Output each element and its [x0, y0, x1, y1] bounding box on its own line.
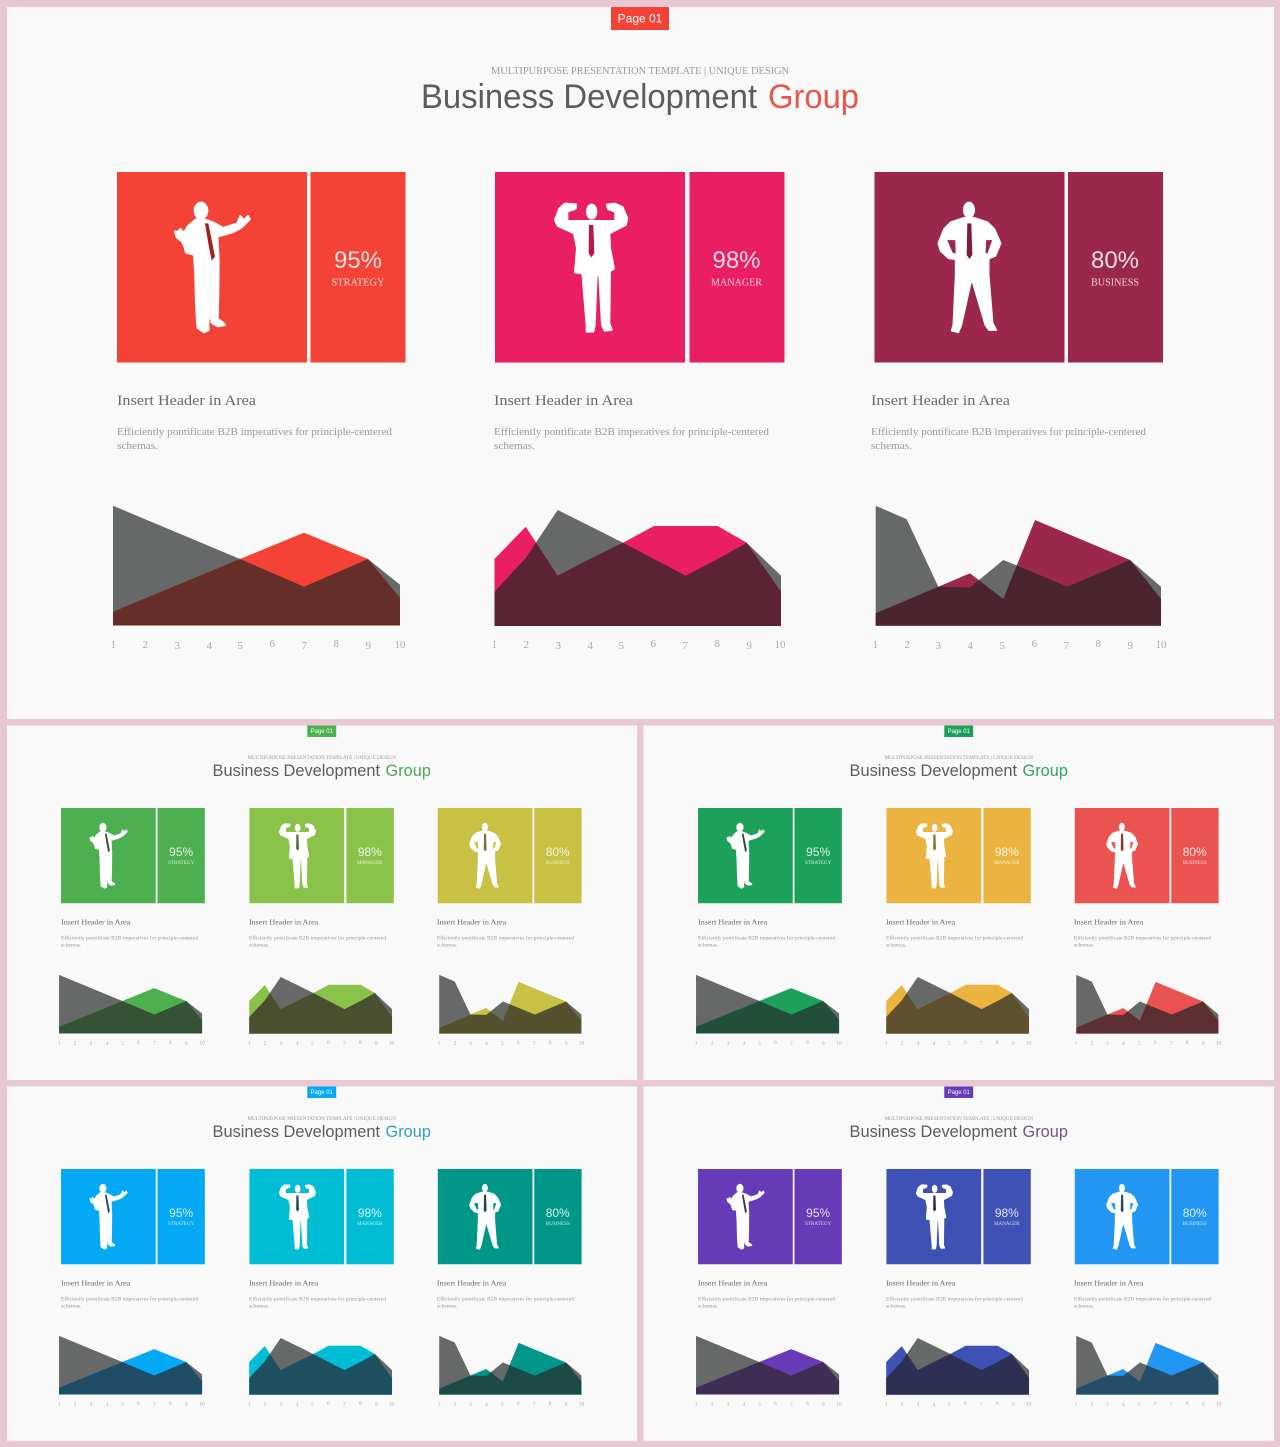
slide content: blue teal: Group: [386, 1122, 431, 1141]
slide content: purple indigo blue: 95%: [806, 1206, 830, 1220]
slide content: green: 12345678910: [58, 1040, 205, 1047]
slide content: green: Insert Header in Area: [61, 917, 131, 927]
text block: column 1: [117, 393, 392, 452]
panel: strategy card: 95%: [334, 247, 382, 274]
slide content: green amber red: Page 01: [948, 729, 971, 735]
icon: flexing businessman: [555, 204, 627, 332]
slide: purple indigo blue: [644, 1086, 1274, 1441]
slide content: green: 12345678910: [438, 1040, 584, 1047]
slide content: blue teal: Page 01: [311, 1090, 334, 1096]
slide content: blue teal: BUSINESS: [546, 1221, 570, 1227]
slide content: green: Efficiently pontificate B2B imperatives for principle-centered: [437, 934, 574, 942]
slide content: blue teal: 12345678910: [438, 1401, 584, 1408]
slide content: purple indigo blue: schemas.: [886, 1303, 907, 1310]
slide content: purple indigo blue: MULTIPURPOSE PRESENTATION TEMPLATE | UNIQUE DESIGN: [884, 1116, 1033, 1122]
slide content: green amber red: Business Development: [850, 761, 1017, 780]
slide content: purple indigo blue: Efficiently pontificate B2B imperatives for principle-centered: [1074, 1295, 1211, 1303]
panel: business card: BUSINESS: [1091, 276, 1139, 288]
slide content: green amber red: 95%: [806, 845, 830, 859]
slide content: green: 98%: [358, 845, 382, 859]
slide content: green: MULTIPURPOSE PRESENTATION TEMPLATE | UNIQUE DESIGN: [247, 755, 396, 761]
slide content: green amber red: Insert Header in Area: [886, 917, 956, 927]
slide content: blue teal: 12345678910: [248, 1401, 395, 1408]
slide content: green: Insert Header in Area: [249, 917, 319, 927]
slide content: blue teal: Insert Header in Area: [61, 1278, 131, 1288]
slide content: green amber red: Group: [1023, 761, 1068, 780]
slide content: purple indigo blue: [695, 1086, 1221, 1408]
panel: business card: 80%: [1091, 247, 1139, 274]
slide content: purple indigo blue: 98%: [995, 1206, 1019, 1220]
text block: column 3: [871, 393, 1146, 452]
slide content: green: Group: [386, 761, 431, 780]
text block: column 1: schemas.: [117, 440, 158, 452]
area chart 2: 12345678910: [492, 638, 786, 652]
slide content: green amber red: 12345678910: [1075, 1040, 1221, 1047]
slide content: blue teal: schemas.: [61, 1303, 82, 1310]
title: Business Development: [421, 78, 758, 116]
icon: presenting businessman: [175, 202, 250, 332]
slide content: blue teal: Business Development: [213, 1122, 380, 1141]
slide content: blue teal: Efficiently pontificate B2B imperatives for principle-centered: [437, 1295, 574, 1303]
slide content: blue teal: Efficiently pontificate B2B imperatives for principle-centered: [61, 1295, 198, 1303]
slide content: blue teal: 12345678910: [58, 1401, 205, 1408]
text block: column 2: [494, 393, 769, 452]
slide content: purple indigo blue: Insert Header in Area: [886, 1278, 956, 1288]
slide: blue teal: [7, 1086, 637, 1441]
slide content: purple indigo blue: 80%: [1183, 1206, 1207, 1220]
icon: hands on hips businessman: [938, 202, 1001, 332]
slide content: purple indigo blue: schemas.: [1074, 1303, 1095, 1310]
slide content: green: 95%: [169, 845, 193, 859]
slide content: green amber red: schemas.: [1074, 942, 1095, 949]
title: Group: [768, 78, 859, 116]
slide content: purple indigo blue: 12345678910: [1075, 1401, 1221, 1408]
slide content: purple indigo blue: STRATEGY: [805, 1221, 831, 1227]
slide content: green: schemas.: [61, 942, 82, 949]
panel: business card: [874, 172, 1163, 362]
slide content: green amber red: 12345678910: [885, 1040, 1032, 1047]
slide content: purple indigo blue: Insert Header in Area: [698, 1278, 768, 1288]
slide content: blue teal: Insert Header in Area: [437, 1278, 507, 1288]
panel: manager card: MANAGER: [711, 276, 763, 288]
slide content: green: 80%: [546, 845, 570, 859]
slide content: blue teal: schemas.: [249, 1303, 270, 1310]
slide content: blue teal: 95%: [169, 1206, 193, 1220]
slide content: green: Efficiently pontificate B2B imperatives for principle-centered: [249, 934, 386, 942]
slide content: green amber red: schemas.: [886, 942, 907, 949]
slide content: purple indigo blue: Page 01: [948, 1090, 971, 1096]
slide content: purple indigo blue: Group: [1023, 1122, 1068, 1141]
slide content: green: Efficiently pontificate B2B imperatives for principle-centered: [61, 934, 198, 942]
slide content: purple indigo blue: Efficiently pontificate B2B imperatives for principle-centered: [886, 1295, 1023, 1303]
panel: strategy card: [117, 172, 406, 362]
text block: column 1: Insert Header in Area: [117, 393, 256, 409]
slide content: green: STRATEGY: [168, 860, 194, 866]
slide: main red and pink: [7, 7, 1274, 719]
slide content: purple indigo blue: 12345678910: [695, 1401, 842, 1408]
subtitle: MULTIPURPOSE PRESENTATION TEMPLATE | UNIQUE DESIGN: [491, 66, 789, 77]
slide content: blue teal: Insert Header in Area: [249, 1278, 319, 1288]
slide content: purple indigo blue: Efficiently pontificate B2B imperatives for principle-centered: [698, 1295, 835, 1303]
slide: green amber red: [644, 726, 1274, 1080]
slide content: green: MANAGER: [357, 860, 383, 866]
slide content: green amber red: 98%: [995, 845, 1019, 859]
slide content: green: Page 01: [311, 729, 334, 735]
slide content: green: [58, 726, 584, 1047]
slide content: purple indigo blue: schemas.: [698, 1303, 719, 1310]
slide content: purple indigo blue: Business Development: [850, 1122, 1017, 1141]
page tab: [611, 7, 669, 30]
slide content: green amber red: Efficiently pontificate B2B imperatives for principle-centered: [886, 934, 1023, 942]
slide content: blue teal: STRATEGY: [168, 1221, 194, 1227]
slide content: blue teal: 80%: [546, 1206, 570, 1220]
area chart 3: [872, 506, 1167, 652]
slide content: green: Business Development: [213, 761, 380, 780]
slide content: blue teal: MULTIPURPOSE PRESENTATION TEMPLATE | UNIQUE DESIGN: [247, 1116, 396, 1122]
area chart 1: 12345678910: [110, 638, 406, 652]
slide content: purple indigo blue: Insert Header in Area: [1074, 1278, 1144, 1288]
page tab: Page 01: [618, 12, 663, 26]
text block: column 2: schemas.: [494, 440, 535, 452]
slide: green: [7, 726, 637, 1080]
slide content: green: Insert Header in Area: [437, 917, 507, 927]
slide content: green: schemas.: [249, 942, 270, 949]
slide content: green amber red: Insert Header in Area: [1074, 917, 1144, 927]
slide content: green amber red: Efficiently pontificate B2B imperatives for principle-centered: [698, 934, 835, 942]
slide content: green: 12345678910: [248, 1040, 395, 1047]
slide content: green amber red: 12345678910: [695, 1040, 842, 1047]
text block: column 3: schemas.: [871, 440, 912, 452]
slide content: green amber red: [695, 726, 1221, 1047]
text block: column 2: Efficiently pontificate B2B imperatives for principle-centered: [494, 426, 769, 438]
text block: column 3: Insert Header in Area: [871, 393, 1010, 409]
text block: column 1: Efficiently pontificate B2B imperatives for principle-centered: [117, 426, 392, 438]
slide content: green amber red: BUSINESS: [1183, 860, 1207, 866]
slide content: green amber red: schemas.: [698, 942, 719, 949]
area chart 2: [492, 510, 786, 652]
slide content: green: BUSINESS: [546, 860, 570, 866]
slide content: green amber red: MULTIPURPOSE PRESENTATION TEMPLATE | UNIQUE DESIGN: [884, 755, 1033, 761]
slide content: green amber red: MANAGER: [994, 860, 1020, 866]
panel: manager card: 98%: [712, 247, 761, 274]
slide content: blue teal: Efficiently pontificate B2B imperatives for principle-centered: [249, 1295, 386, 1303]
area chart 3: 12345678910: [872, 638, 1167, 652]
panel: manager card: [495, 172, 784, 362]
slide content: green amber red: STRATEGY: [805, 860, 831, 866]
slide content: green: schemas.: [437, 942, 458, 949]
slide content: green amber red: 80%: [1183, 845, 1207, 859]
slide content: blue teal: MANAGER: [357, 1221, 383, 1227]
text block: column 2: Insert Header in Area: [494, 393, 633, 409]
slide content: blue teal: schemas.: [437, 1303, 458, 1310]
slide content: green amber red: Insert Header in Area: [698, 917, 768, 927]
slide content: purple indigo blue: MANAGER: [994, 1221, 1020, 1227]
slide content: purple indigo blue: BUSINESS: [1183, 1221, 1207, 1227]
slide content: purple indigo blue: 12345678910: [885, 1401, 1032, 1408]
area chart 1: [110, 506, 406, 652]
text block: column 3: Efficiently pontificate B2B imperatives for principle-centered: [871, 426, 1146, 438]
slide content: green amber red: Efficiently pontificate B2B imperatives for principle-centered: [1074, 934, 1211, 942]
slide content: blue teal: [58, 1086, 584, 1408]
slide content: blue teal: 98%: [358, 1206, 382, 1220]
panel: strategy card: STRATEGY: [332, 276, 385, 288]
